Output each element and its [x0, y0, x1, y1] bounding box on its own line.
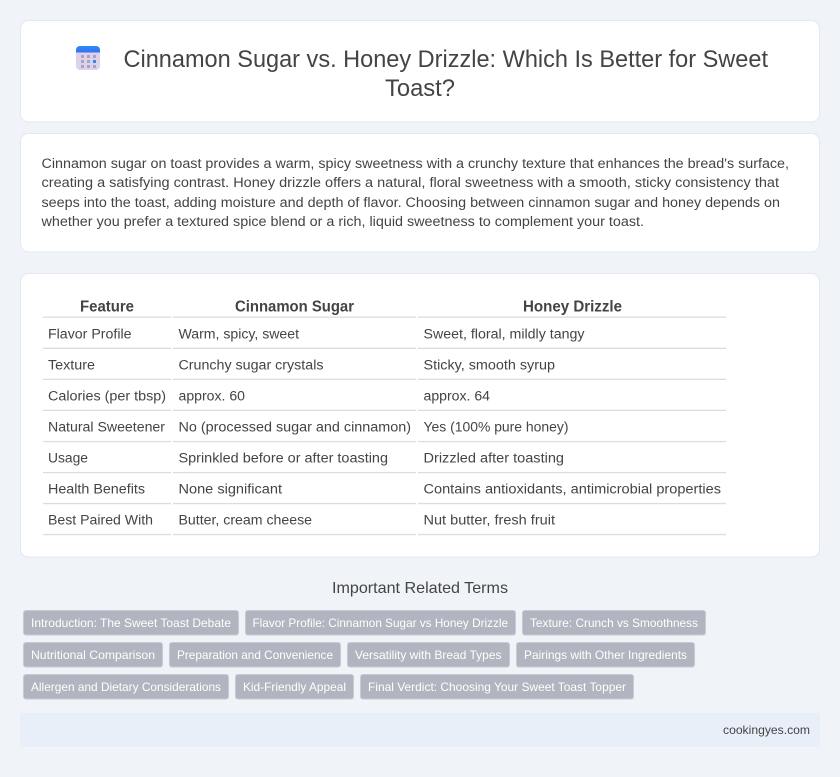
- title: Toast?: [385, 75, 455, 102]
- table row: texture: [43, 358, 726, 380]
- table row: health benefits: None significant: [178, 482, 282, 498]
- table row: best paired with: [43, 512, 726, 535]
- tag: final verdict: [360, 674, 634, 699]
- table row: natural sweetener: Natural Sweetener: [48, 420, 165, 436]
- tag: kid-friendly: [236, 674, 354, 699]
- related terms heading: Important Related Terms: [332, 580, 508, 597]
- tag: nutritional comparison: [24, 642, 162, 667]
- table header row: Honey Drizzle: [523, 298, 622, 316]
- tag: versatility: [348, 642, 510, 667]
- intro paragraph: whether you prefer a textured spice blend or a rich, liquid sweetness to complement your toast.: [40, 214, 644, 230]
- table row: calories: approx. 64: [424, 388, 490, 404]
- table row: flavor profile: Sweet, floral, mildly tangy: [424, 326, 585, 342]
- table row: texture: Sticky, smooth syrup: [424, 358, 555, 374]
- table row: best paired with: Best Paired With: [48, 512, 153, 528]
- table row: best paired with: Nut butter, fresh fruit: [424, 512, 555, 528]
- table row: flavor profile: Warm, spicy, sweet: [178, 326, 299, 342]
- tag: versatility: Versatility with Bread Types: [355, 648, 502, 662]
- tag: introduction: [24, 610, 238, 635]
- footer bar: cookingyes.com: [723, 723, 810, 737]
- table header row: [43, 298, 726, 318]
- table row: usage: Drizzled after toasting: [424, 450, 564, 466]
- tag: flavor profile: [246, 610, 516, 635]
- table row: calories: [43, 388, 726, 411]
- table row: health benefits: Contains antioxidants, antimicrobial properties: [424, 482, 721, 498]
- related terms tags: [24, 610, 706, 699]
- title: Cinnamon Sugar vs. Honey Drizzle: Which Is Better for Sweet: [124, 46, 768, 73]
- table row: natural sweetener: No (processed sugar and cinnamon): [178, 420, 411, 436]
- tag: allergen: Allergen and Dietary Considerations: [31, 680, 221, 694]
- table row: calories: approx. 60: [178, 388, 245, 404]
- title: [124, 46, 768, 102]
- table row: flavor profile: [43, 326, 726, 349]
- intro paragraph: Cinnamon sugar on toast provides a warm, spicy sweetness with a crunchy texture that enhances the bread's surface,: [42, 156, 789, 172]
- tag: preparation: Preparation and Convenience: [177, 648, 333, 662]
- tag: pairings: Pairings with Other Ingredients: [524, 648, 687, 662]
- tag: kid-friendly: Kid-Friendly Appeal: [243, 680, 346, 694]
- table row: calories: Calories (per tbsp): [48, 388, 166, 404]
- table row: natural sweetener: [43, 420, 726, 442]
- table row: flavor profile: Flavor Profile: [48, 326, 132, 342]
- tag: texture: Texture: Crunch vs Smoothness: [530, 616, 698, 630]
- tag: pairings: [516, 642, 694, 667]
- table row: usage: Usage: [48, 450, 88, 466]
- icon: calendar: [76, 46, 100, 70]
- table row: health benefits: [43, 482, 726, 504]
- tag: flavor profile: Flavor Profile: Cinnamon Sugar vs Honey Drizzle: [252, 616, 508, 630]
- table row: health benefits: Health Benefits: [48, 482, 145, 498]
- table row: natural sweetener: Yes (100% pure honey): [424, 420, 568, 436]
- intro paragraph: creating a satisfying contrast. Honey drizzle offers a natural, floral sweetness with a smooth, sticky consistency that: [42, 175, 779, 191]
- table row: best paired with: Butter, cream cheese: [178, 512, 312, 528]
- footer bar: [20, 713, 820, 747]
- tag: final verdict: Final Verdict: Choosing Your Sweet Toast Topper: [368, 680, 626, 694]
- tag: introduction: Introduction: The Sweet Toast Debate: [31, 616, 231, 630]
- tag: preparation: [170, 642, 340, 667]
- tag: texture: [522, 610, 706, 635]
- table row: usage: Sprinkled before or after toasting: [178, 450, 388, 466]
- table header row: Feature: [80, 298, 134, 316]
- table row: texture: Texture: [48, 358, 95, 374]
- table row: usage: [43, 450, 726, 473]
- tag: nutritional comparison: Nutritional Comparison: [31, 648, 155, 662]
- table header row: Cinnamon Sugar: [235, 298, 354, 316]
- panel: comparison table: [20, 274, 820, 557]
- header panel: [20, 20, 820, 122]
- table row: texture: Crunchy sugar crystals: [178, 358, 324, 374]
- intro paragraph: [40, 156, 789, 230]
- intro paragraph: seeps into the toast, adding moisture and depth of flavor. Choosing between cinnamon sugar and honey depends on: [42, 195, 780, 211]
- tag: allergen: [24, 674, 228, 699]
- panel: introduction text: [20, 134, 820, 252]
